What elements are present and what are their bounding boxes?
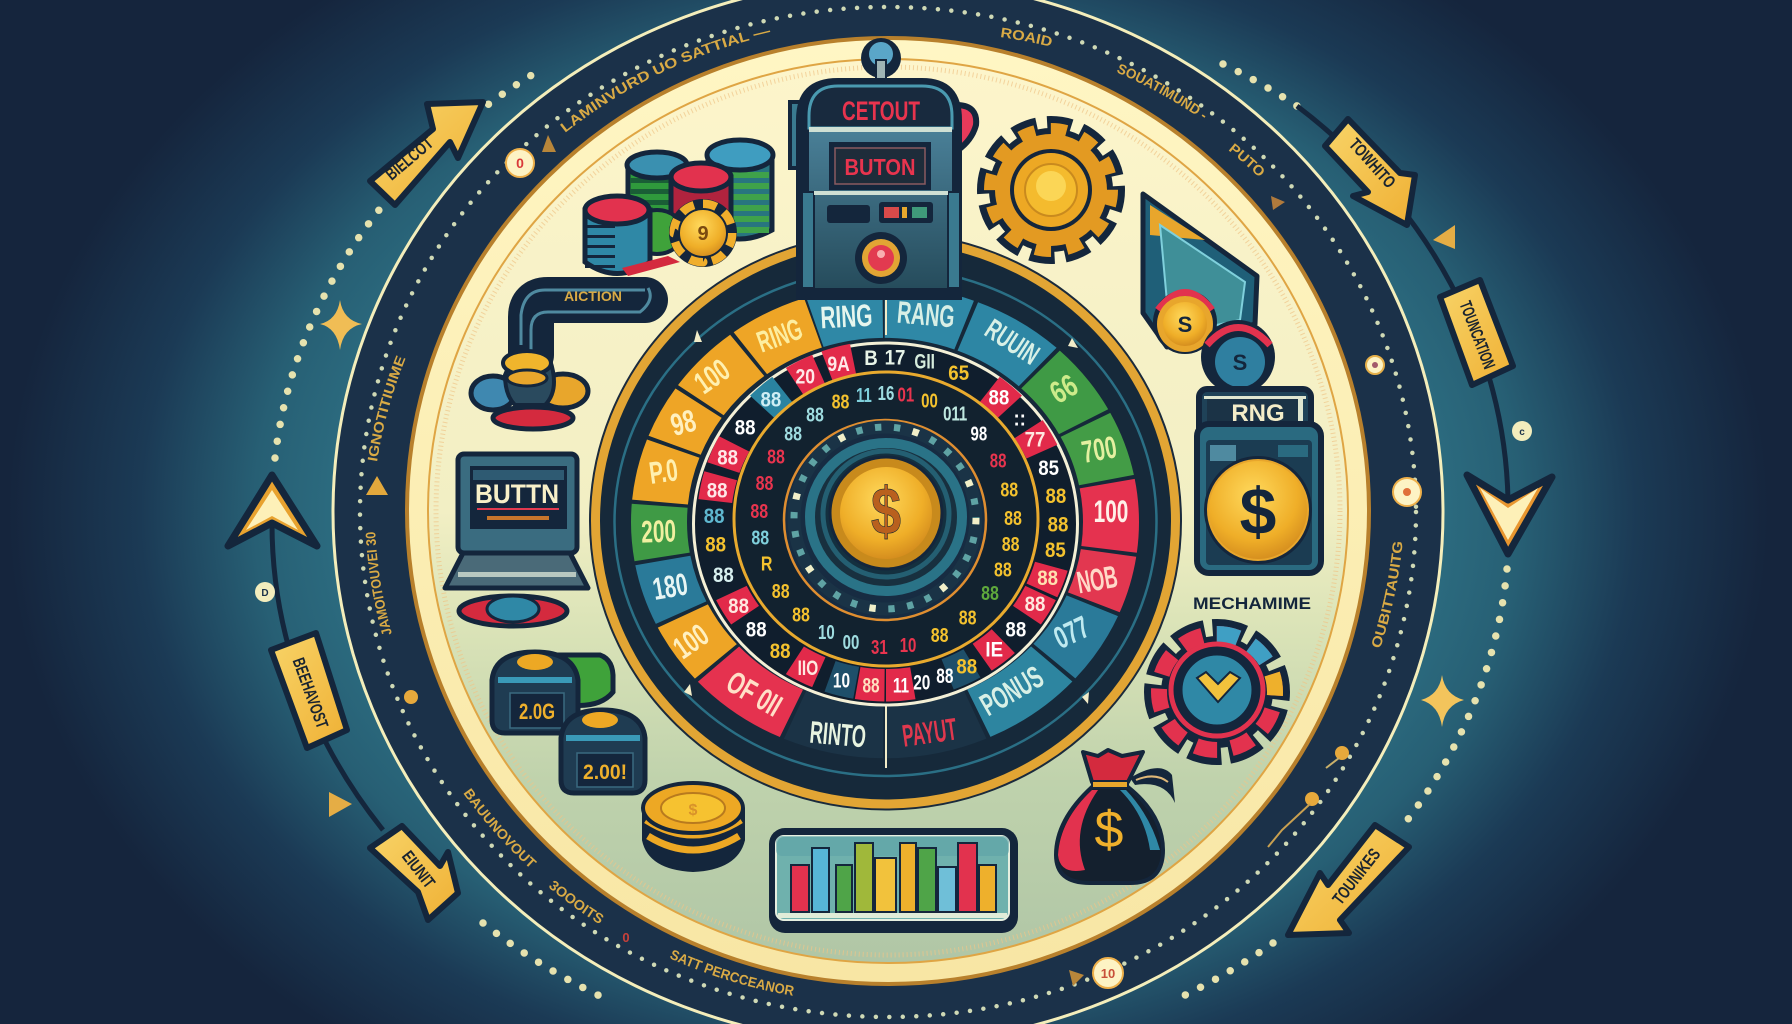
- inner numbers ring labels: 00: [843, 631, 859, 654]
- segment labels: 100: [667, 617, 715, 666]
- numbers ring labels: [704, 347, 1068, 697]
- lever pipe: [521, 288, 650, 355]
- chip box 2.00: [561, 710, 645, 793]
- left chip stack: [585, 196, 650, 274]
- band markers and badges: [366, 135, 1421, 988]
- heading: CETOUT: CETOUT: [842, 96, 920, 126]
- central wheel: [590, 233, 1180, 809]
- star: left: [320, 300, 362, 350]
- chip box 2.0G: [492, 652, 613, 733]
- money bag: $: [1095, 801, 1124, 859]
- numbers ring labels: ::: [1013, 407, 1026, 431]
- segment labels: 98: [667, 403, 700, 443]
- numbers ring labels: 88: [705, 534, 726, 557]
- knob: [861, 38, 901, 80]
- blue dollar chip: S: [1233, 350, 1247, 375]
- band markers and badges: 0: [516, 155, 524, 171]
- numbers ring labels: 65: [948, 362, 969, 385]
- band captions: SATT PERCCEANOR: [670, 950, 794, 996]
- inner numbers ring labels: 01: [898, 383, 914, 406]
- inner numbers ring labels: 88: [806, 404, 824, 426]
- gold gear: [987, 126, 1115, 254]
- dark outer band: [333, 0, 1443, 1024]
- inner dotted ring: [360, 7, 1416, 1017]
- segment labels: RING: [753, 313, 807, 360]
- small outer markers: [255, 225, 1532, 817]
- wheel axis divider: [885, 287, 887, 768]
- RNG coin: [1204, 456, 1312, 564]
- numbers ring labels: 77: [1025, 429, 1045, 452]
- inner numbers ring labels: 88: [990, 449, 1007, 472]
- segment labels: OF 0II: [720, 664, 788, 724]
- bar chart panel: [769, 828, 1018, 933]
- RNG coin: $: [1240, 474, 1276, 548]
- green mid chip: [631, 210, 683, 254]
- machine button: [855, 232, 907, 284]
- machine panel: [809, 128, 952, 288]
- teal chip stack: [707, 140, 773, 239]
- star: right: [1421, 675, 1464, 727]
- gold chip: [669, 199, 737, 267]
- inner numbers ring labels: 10: [900, 634, 917, 657]
- numbers ring labels: 88: [770, 640, 791, 663]
- back green chip stack: [627, 152, 688, 235]
- band captions: 3OOOITS: [549, 880, 604, 923]
- inner numbers ring labels: 88: [751, 527, 769, 549]
- band markers and badges: 0: [622, 930, 630, 945]
- inner numbers ring labels: 10: [818, 621, 835, 644]
- numbers ring labels: 88: [988, 387, 1009, 410]
- arrow: bottom left: [370, 826, 458, 920]
- numbers ring labels: 88: [728, 595, 749, 619]
- inner numbers ring labels: R: [761, 553, 772, 575]
- laptop: BUTTN: [475, 479, 559, 509]
- segment labels: P.0: [647, 452, 680, 491]
- numbers ring labels: GII: [914, 349, 935, 373]
- segment labels: [641, 294, 1128, 755]
- band captions: SOUATIMUND -: [1117, 64, 1206, 118]
- coin stack: [643, 783, 743, 870]
- arrowhead: right: [1467, 475, 1552, 554]
- tick squares ring: [794, 427, 976, 609]
- outer flow line: [272, 106, 1508, 830]
- inner numbers ring labels: 88: [832, 391, 849, 413]
- inner numbers ring labels: 88: [1002, 534, 1020, 556]
- inner numbers ring labels: 88: [1004, 507, 1022, 529]
- numbers ring labels: 88: [936, 664, 953, 688]
- numbers ring labels: 17: [885, 347, 905, 370]
- band captions: ROAID: [1001, 28, 1052, 46]
- small outer markers: D: [261, 588, 269, 599]
- segment labels: PAYUT: [900, 712, 959, 754]
- band captions: BAUUNOVOUT: [464, 788, 537, 867]
- arrow: top left: BIELCOT: [382, 133, 438, 184]
- control panels: [827, 202, 933, 223]
- small outer markers: c: [1519, 427, 1525, 438]
- segment labels: 700: [1079, 429, 1119, 470]
- inner numbers ring labels: 88: [931, 624, 949, 647]
- numbers ring labels: 88: [735, 416, 755, 440]
- chip box 2.00: 2.00!: [583, 761, 627, 784]
- numbers ring labels: 88: [1045, 485, 1066, 508]
- multicolour gear: [1155, 630, 1279, 754]
- label: right: [1440, 280, 1513, 385]
- wheel rim: [590, 233, 1180, 809]
- wheel segments: [659, 312, 1111, 732]
- inner numbers ring labels: 88: [792, 604, 810, 626]
- numbers ring labels: 85: [1045, 539, 1066, 562]
- wheel direction marks: [684, 330, 1089, 704]
- inner numbers ring labels: 88: [750, 500, 768, 523]
- numbers ring labels: 88: [1037, 567, 1058, 590]
- chip box 2.0G: 2.0G: [519, 699, 555, 724]
- inner numbers ring labels: 88: [959, 607, 977, 629]
- numbers ring labels: IE: [985, 638, 1003, 662]
- teal hub rings: [810, 443, 962, 591]
- red chip streaks: [622, 256, 680, 276]
- arrow: top left: [370, 102, 483, 205]
- inner numbers ring labels: 11: [856, 384, 872, 406]
- band captions: PUTO: [1228, 143, 1264, 176]
- inner numbers ring labels: 00: [921, 390, 938, 412]
- centre coin: $: [871, 474, 901, 548]
- numbers ring labels: 88: [1025, 593, 1045, 616]
- RNG machine: RNG: [1231, 400, 1285, 427]
- main disc: [407, 38, 1369, 984]
- band markers and badges: 10: [1101, 966, 1115, 981]
- numbers ring labels: B: [864, 347, 878, 370]
- side handle: [790, 102, 976, 168]
- numbers ring labels: 88: [704, 505, 724, 528]
- numbers ring labels: 88: [761, 389, 781, 412]
- inner numbers ring labels: 88: [767, 446, 785, 468]
- band captions: OUBITTAUITG: [1372, 542, 1402, 648]
- inner numbers ring labels: 31: [871, 636, 888, 658]
- numbers ring outer: [694, 343, 1078, 705]
- segment labels: 66: [1044, 367, 1084, 410]
- arrow: bottom right: TOUNIKES: [1329, 845, 1385, 909]
- screen: BUTON: [829, 142, 931, 190]
- numbers ring labels: 85: [1038, 457, 1059, 480]
- inner numbers ring labels: 88: [981, 582, 999, 604]
- numbers ring labels: 10: [833, 668, 850, 692]
- segment labels: 180: [650, 566, 690, 607]
- segment labels: RING: [820, 297, 873, 335]
- arrow: top right: TOWHITO: [1345, 135, 1399, 192]
- arrowhead: left: [228, 475, 317, 546]
- inner numbers ring labels: 88: [1000, 479, 1018, 501]
- lever pipe: AICTION: [564, 288, 622, 304]
- band captions: JAMOITOUVEI 30: [366, 532, 392, 634]
- inner numbers ring labels: 16: [878, 382, 894, 405]
- segment labels: RUUIN: [979, 313, 1045, 372]
- segment labels: PONUS: [975, 660, 1049, 723]
- red chip stack: [671, 163, 731, 232]
- numbers ring labels: 88: [717, 446, 738, 470]
- inner numbers ring labels: 88: [994, 559, 1012, 581]
- inner numbers ring labels: 88: [756, 472, 773, 494]
- band captions: [366, 28, 1402, 996]
- screen: BUTON: BUTON: [844, 154, 916, 180]
- band captions: IGNOTITIUIME: [368, 355, 406, 461]
- numbers ring labels: 20: [795, 365, 815, 389]
- bill and chips: [1143, 194, 1275, 394]
- bars: [791, 843, 996, 912]
- laptop: [445, 454, 588, 588]
- chip stacks top left: [585, 140, 773, 276]
- inner numbers ring labels: 88: [772, 580, 790, 602]
- slot machine: [790, 38, 976, 300]
- label: left: [271, 633, 347, 748]
- inner numbers ring labels: 98: [971, 422, 987, 445]
- numbers ring labels: 88: [1005, 618, 1026, 642]
- numbers ring labels: IIO: [798, 656, 818, 680]
- arrow: top right: [1325, 119, 1415, 225]
- gold dollar chip: S: [1178, 312, 1192, 337]
- band captions: LAMINVURD UO SATTIAL —: [560, 30, 770, 132]
- gold chip: 9: [697, 223, 709, 245]
- numbers ring labels: 88: [862, 673, 880, 697]
- segment labels: 100: [1094, 494, 1128, 529]
- numbers ring labels: 11: [893, 673, 909, 697]
- numbers ring labels: 88: [956, 656, 977, 679]
- segment labels: NOB: [1074, 560, 1120, 601]
- numbers ring labels: 9A: [827, 352, 850, 376]
- machine body: [796, 78, 962, 300]
- inner orange ring: [784, 420, 986, 620]
- numbers ring wedges: [714, 357, 1058, 685]
- segment labels: 077: [1048, 609, 1095, 656]
- chip pile: [471, 351, 588, 429]
- numbers ring labels: 88: [707, 479, 728, 503]
- arrow: bottom right: [1288, 825, 1409, 935]
- blue dollar chip: [1201, 320, 1275, 394]
- arrow: bottom left: EIUNIT: [398, 847, 439, 893]
- inner numbers ring labels: 011: [943, 402, 967, 425]
- heading: MECHAMIME: MECHAMIME: [1193, 594, 1311, 613]
- centre coin: [830, 457, 942, 569]
- side rails: [802, 192, 960, 288]
- inner numbers ring labels: [750, 382, 1022, 658]
- segment labels: 200: [641, 513, 677, 550]
- middle gold ring: [734, 372, 1038, 666]
- RNG machine: [1197, 389, 1321, 573]
- label: left: BEEHAVOST: [288, 656, 331, 731]
- segment labels: 100: [688, 352, 736, 401]
- inner numbers ring labels: 88: [784, 423, 802, 445]
- coin stack: $: [689, 802, 698, 819]
- label: right: TOUNCATION: [1455, 299, 1498, 372]
- money bag: [1056, 750, 1175, 883]
- segment labels: RINTO: [808, 716, 867, 755]
- numbers ring labels: 20: [913, 670, 930, 694]
- numbers ring labels: 88: [1048, 514, 1068, 537]
- numbers ring labels: 88: [746, 618, 767, 642]
- gold dollar chip: [1153, 290, 1217, 354]
- numbers ring labels: 88: [713, 564, 734, 587]
- chip under laptop: [459, 596, 567, 626]
- segment labels: RANG: [896, 294, 956, 335]
- outer dotted path: [275, 64, 1507, 998]
